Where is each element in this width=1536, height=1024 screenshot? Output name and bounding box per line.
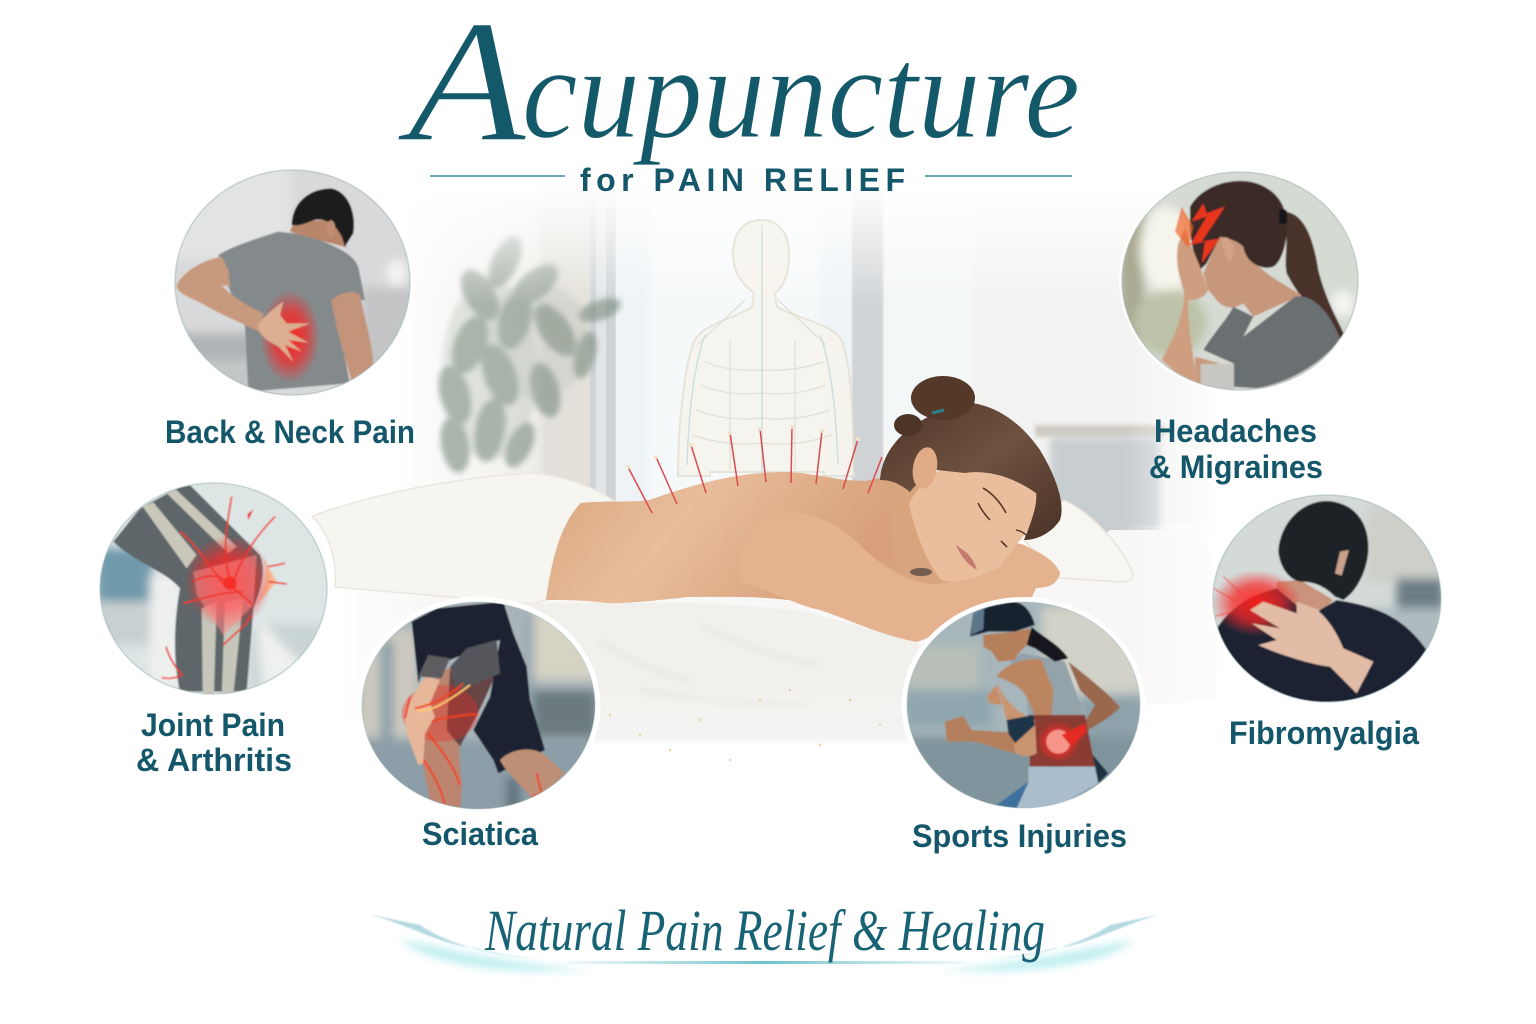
ear	[910, 445, 940, 491]
towel over lower body	[312, 473, 620, 604]
label	[136, 707, 292, 778]
label: Fibromyalgia	[1229, 715, 1419, 751]
facial features	[978, 488, 1026, 547]
label: Sports Injuries	[912, 818, 1127, 854]
hair	[880, 402, 1062, 540]
hair bun	[894, 376, 975, 436]
photo: man holding lower back	[175, 170, 410, 395]
footer: tagline with swoosh	[368, 898, 1162, 971]
label: Back & Neck Pain	[165, 414, 415, 450]
panel: sports injuries	[895, 590, 1155, 854]
face	[909, 470, 1037, 581]
massage table	[320, 525, 1230, 790]
label	[1149, 413, 1323, 485]
plant	[433, 231, 624, 475]
label: Headaches	[1154, 413, 1317, 449]
panel: joint pain and arthritis	[90, 475, 340, 778]
label: & Migraines	[1149, 449, 1323, 485]
lips	[956, 545, 977, 570]
swoosh	[368, 914, 1162, 971]
panel: back and neck pain	[165, 160, 420, 450]
title: Acupuncture	[397, 0, 1080, 178]
label: Sciatica	[422, 816, 538, 852]
title	[397, 0, 1080, 198]
acupuncture needles	[626, 425, 882, 513]
ghost body meridian figure	[678, 220, 854, 476]
title: Acupuncture: cupuncture	[522, 19, 1080, 166]
photo: man holding leg	[362, 602, 595, 809]
photo: injured runner	[907, 602, 1140, 808]
shadow under chin	[910, 568, 932, 576]
neck	[850, 470, 960, 592]
label: Joint Pain	[141, 707, 285, 743]
panel: fibromyalgia	[1212, 494, 1442, 750]
photo: inflamed knee	[100, 483, 327, 694]
sparkles under table	[609, 689, 881, 761]
back and torso	[546, 472, 895, 603]
background: treatment room	[390, 186, 1230, 558]
woman lying on table	[546, 376, 1062, 642]
label: & Arthritis	[136, 742, 292, 778]
panel: headaches and migraines	[1119, 171, 1359, 484]
arm	[740, 513, 1060, 642]
photo: woman holding head	[1122, 172, 1358, 390]
photo: person holding shoulder	[1213, 495, 1441, 702]
tagline: Natural Pain Relief & Healing	[484, 898, 1045, 963]
subtitle: for PAIN RELIEF: for PAIN RELIEF	[580, 162, 905, 198]
panel: sciatica	[350, 590, 610, 852]
pillow	[1024, 500, 1133, 582]
